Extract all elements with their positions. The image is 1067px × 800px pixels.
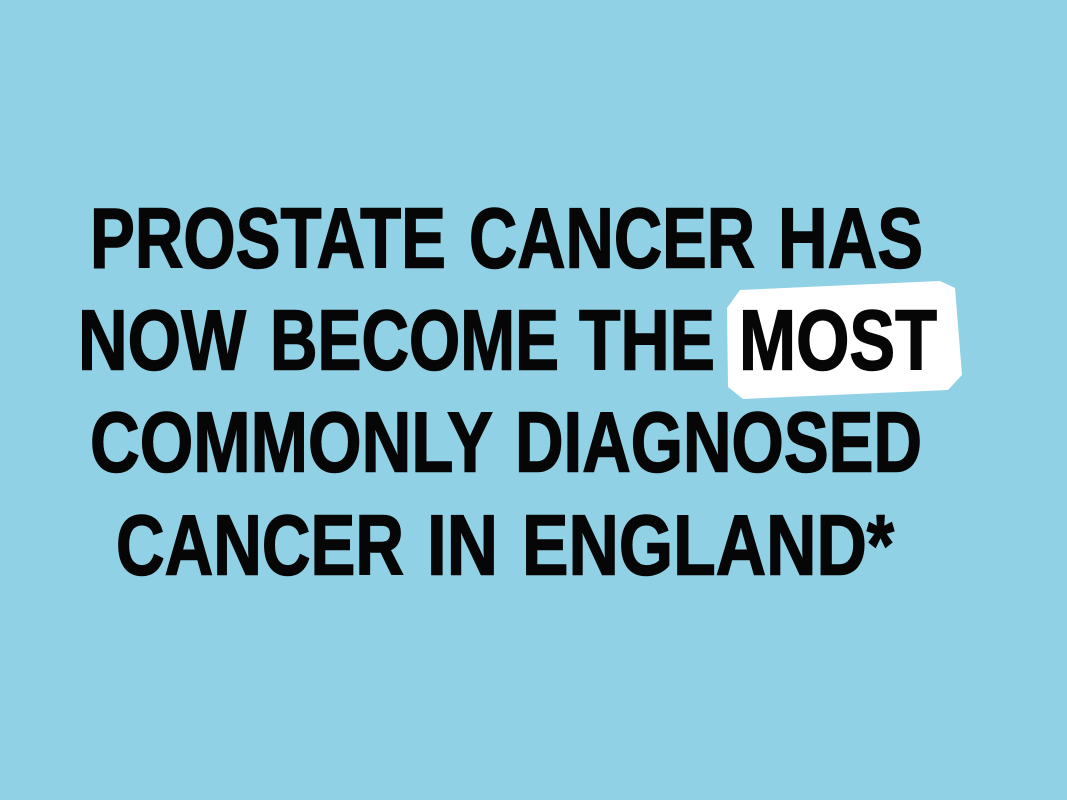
headline line 1 — [90, 192, 923, 286]
headline line 4: ENGLAND* — [522, 498, 894, 594]
headline statement — [78, 192, 937, 594]
headline line 1: PROSTATE — [90, 192, 446, 286]
headline line 4 — [116, 498, 894, 594]
headline line 3: COMMONLY — [90, 396, 493, 490]
headline line 1: CANCER — [469, 192, 755, 286]
highlighted word MOST: MOST — [739, 294, 937, 388]
headline line 3: DIAGNOSED — [515, 396, 922, 490]
headline line 2: NOW — [78, 294, 247, 388]
headline line 1: HAS — [778, 192, 923, 286]
headline line 2 — [78, 294, 715, 388]
headline line 2: BECOME — [270, 294, 559, 388]
white highlight shape behind MOST — [727, 281, 962, 399]
headline line 4: CANCER — [116, 498, 404, 594]
headline line 4: IN — [427, 498, 498, 594]
headline line 3 — [90, 396, 922, 490]
headline line 2: THE — [579, 294, 715, 388]
